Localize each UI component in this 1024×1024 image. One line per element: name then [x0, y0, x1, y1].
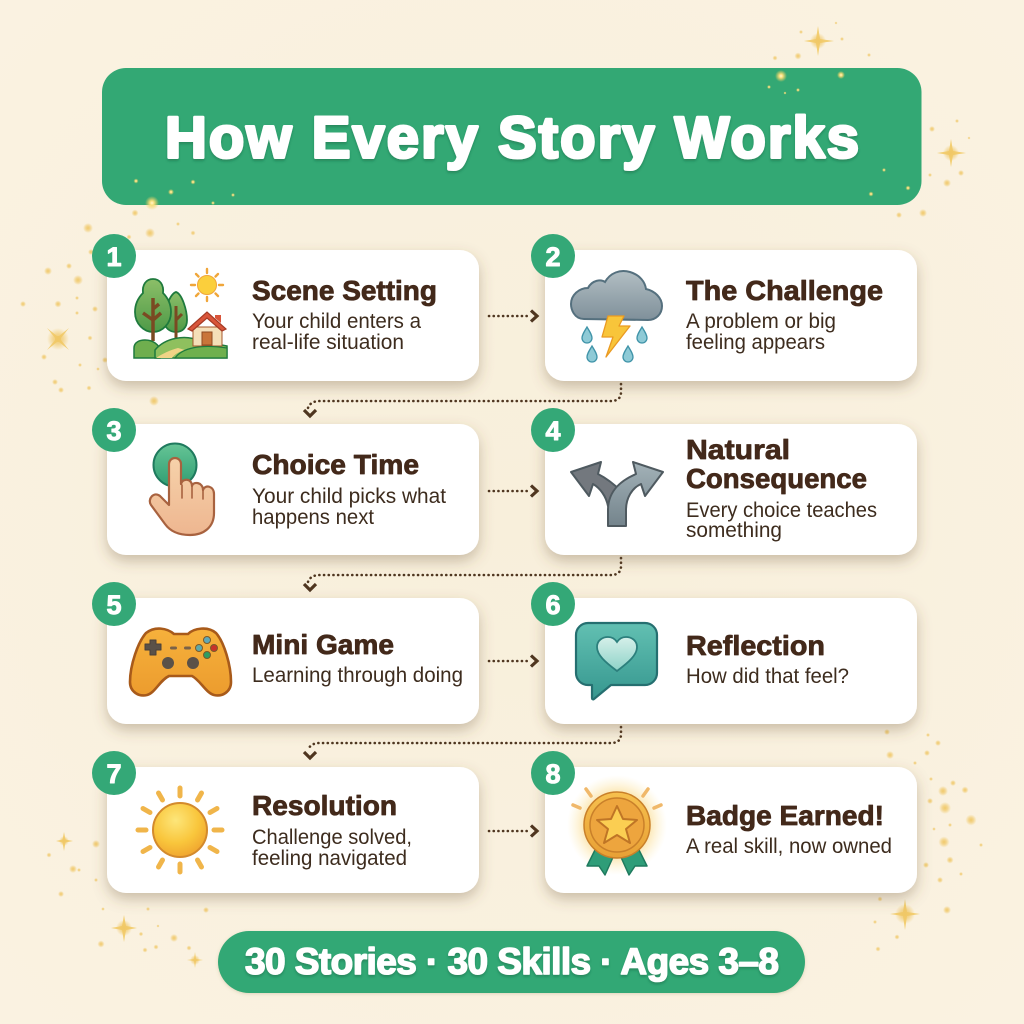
card 2: The Challenge [545, 250, 917, 381]
icon: speech bubble with heart [576, 623, 657, 699]
badge 7 [92, 751, 136, 795]
card 4: Natural Consequence [545, 424, 917, 555]
heading: Badge Earned! [686, 800, 884, 831]
description: A real skill, now owned [686, 835, 892, 858]
badge 5 [92, 582, 136, 626]
card 5: Mini Game [107, 598, 479, 724]
heading: Mini Game [252, 629, 394, 660]
badge 8 [531, 751, 575, 795]
card 8: Badge Earned [545, 767, 917, 893]
card 6: Reflection [545, 598, 917, 724]
badge 1 [92, 234, 136, 278]
heading: Scene Setting [252, 275, 437, 306]
description: something [686, 519, 782, 542]
badge 5: 5 [106, 590, 122, 620]
description [252, 310, 421, 354]
description: happens next [252, 506, 374, 529]
description: Learning through doing [252, 664, 463, 687]
arrow 7 to 8 [489, 826, 537, 836]
badge 7: 7 [106, 759, 122, 789]
description: Challenge solved, [252, 826, 412, 849]
heading: Reflection [686, 630, 825, 661]
icon: storm cloud [571, 271, 662, 362]
description: feeling appears [686, 331, 825, 354]
card 7: Resolution [107, 767, 479, 893]
title text: How Every Story Works [165, 106, 859, 170]
number badges [92, 234, 575, 795]
description: real-life situation [252, 331, 404, 354]
connector 2 to 3 [304, 384, 621, 416]
description: Every choice teaches [686, 499, 877, 522]
footer pill [218, 931, 805, 993]
icon: medal with star [567, 775, 667, 875]
description [686, 499, 877, 542]
description: Your child enters a [252, 310, 421, 333]
badge 8: 8 [545, 759, 561, 789]
icon: forked arrows [571, 462, 663, 526]
card 3: Choice Time [107, 424, 479, 555]
heading [686, 434, 867, 494]
badge 4 [531, 408, 575, 452]
connector 4 to 5 [304, 558, 621, 590]
description [252, 826, 412, 870]
badge 6 [531, 582, 575, 626]
badge 2: 2 [545, 242, 561, 272]
description: feeling navigated [252, 847, 407, 870]
heading: Natural [686, 434, 790, 465]
heading: Resolution [252, 790, 397, 821]
connector 6 to 7 [304, 727, 621, 758]
arrow 5 to 6 [489, 656, 537, 666]
footer text: 30 Stories · 30 Skills · Ages 3–8 [245, 941, 779, 982]
badge 1: 1 [106, 242, 122, 272]
banner sparkles [134, 70, 910, 210]
icon: game controller [130, 629, 231, 695]
icon: sun [138, 788, 222, 872]
arrow 3 to 4 [489, 486, 537, 496]
title banner [102, 68, 922, 210]
icon: hand pressing green button [150, 444, 214, 535]
badge 3: 3 [106, 416, 122, 446]
card 1: Scene Setting [107, 250, 479, 381]
arrow 1 to 2 [489, 310, 537, 322]
description [252, 485, 446, 529]
badge 4: 4 [545, 416, 561, 446]
badge 6: 6 [545, 590, 561, 620]
description [686, 310, 836, 354]
description: How did that feel? [686, 665, 849, 688]
heading: The Challenge [686, 275, 883, 306]
description: A problem or big [686, 310, 836, 333]
description: Your child picks what [252, 485, 446, 508]
heading: Choice Time [252, 449, 419, 480]
heading: Consequence [686, 463, 867, 494]
icon: landscape with trees, house and sun [134, 269, 227, 358]
badge 3 [92, 408, 136, 452]
badge 2 [531, 234, 575, 278]
arrows between cards [304, 310, 621, 836]
